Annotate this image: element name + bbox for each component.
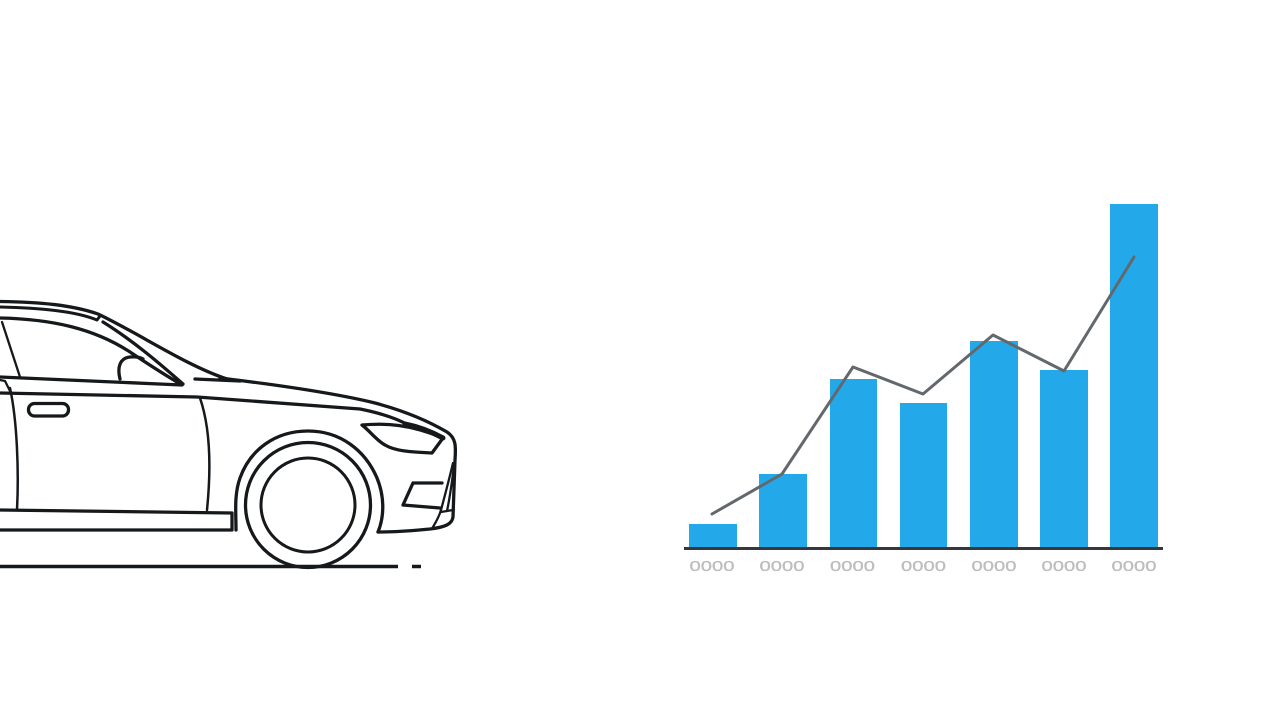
car roof and windshield: [0, 302, 240, 384]
ground line: [0, 565, 421, 568]
axis labels: 0000: [1042, 558, 1086, 575]
axis labels: [690, 558, 1156, 575]
axis labels: 0000: [972, 558, 1016, 575]
axis labels: 0000: [690, 558, 734, 575]
icon: car line drawing: [0, 302, 455, 568]
trend line: [712, 257, 1134, 514]
hood and front body: [220, 378, 455, 532]
axis labels: 0000: [830, 558, 875, 575]
bar chart: [684, 204, 1163, 575]
fog light and bumper: [403, 463, 454, 527]
bars: [689, 204, 1158, 548]
baseline axis: [684, 547, 1163, 550]
axis labels: 0000: [1112, 558, 1156, 575]
door lines and handle: [0, 380, 410, 510]
wheel: [246, 442, 370, 568]
axis labels: 0000: [760, 558, 804, 575]
sill: [0, 510, 232, 530]
side window: [0, 318, 182, 385]
headlight: [362, 424, 443, 453]
axis labels: 0000: [901, 558, 946, 575]
wing mirror: [119, 357, 143, 379]
